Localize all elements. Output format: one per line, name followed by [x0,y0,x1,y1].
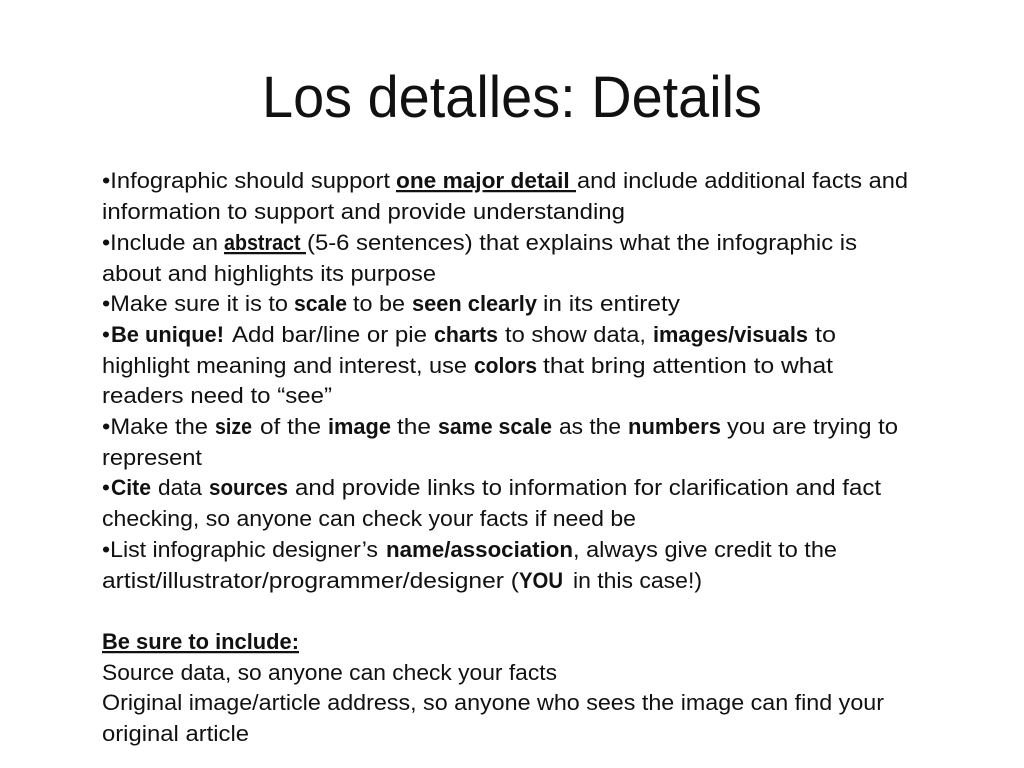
bullet: cite sources: checking, so anyone can check your facts if need be [102,506,636,531]
bullet: be unique: that bring attention to what [543,353,834,378]
bullet: be unique: to show data, [505,322,646,347]
bullet: one major detail: information to support and provide understanding [102,199,625,224]
bullet: one major detail: •Infographic should support [102,168,391,193]
bullet: size of image: of the [260,414,321,439]
line: source data: Source data, so anyone can check your facts [102,660,557,685]
bullet: scale: scale [294,291,347,316]
bullet: designer credit: artist/illustrator/programmer/designer ( [102,568,520,593]
bullet: scale: •Make sure it is to [102,291,288,316]
bullet: designer credit: •List infographic designer’s [102,537,378,562]
bullet: abstract: abstract [224,230,306,255]
bullet: be unique: highlight meaning and interest, use [102,353,467,378]
bullet: cite sources: sources [209,475,288,500]
bullet: size of image: •Make the [102,414,208,439]
bullet: size of image: as the [559,414,621,439]
bullet: designer credit: in this case!) [573,568,702,593]
bullet: be unique: images/visuals [653,322,808,347]
bullet: be unique: Add bar/line or pie [232,322,427,347]
bullet: abstract [102,230,857,286]
bullet: designer credit: , always give credit to the [573,537,837,562]
text block: be sure to include [102,629,885,746]
bullet: be unique: Be unique! [111,322,224,347]
bullet: size of image: numbers [628,414,721,439]
bullet: cite sources: • [102,475,110,500]
bullet: size of image: same scale [438,414,552,439]
bullet: size of image: image [328,414,391,439]
line: original address: original article [102,721,249,746]
bullet: size of image: you are trying to [727,414,898,439]
bullet: designer credit: YOU [519,568,563,593]
bullet: scale [102,291,681,316]
line: original address: Original image/article address, so anyone who sees the image can find your [102,690,885,715]
bullet: be unique: • [102,322,110,347]
bullet: be unique [102,322,836,408]
bullet: be unique: charts [434,322,498,347]
bullet: one major detail: one major detail [396,168,576,193]
bullet: abstract: (5-6 sentences) that explains what the infographic is [307,230,857,255]
bullet: size of image: size [215,414,252,439]
bullet: designer credit [102,537,837,593]
title: Los detalles: Details [262,65,762,130]
bullet: abstract: about and highlights its purpose [102,261,436,286]
bullet: cite sources: data [158,475,202,500]
bullet: be unique: readers need to “see” [102,383,332,408]
bullet: designer credit: name/association [386,537,573,562]
bullet: cite sources: Cite [111,475,151,500]
bullet: cite sources [102,475,882,531]
bullet: one major detail [102,168,908,224]
bullet: size of image: the [397,414,431,439]
bullet: one major detail: and include additional facts and [577,168,908,193]
bullet: scale: in its entirety [543,291,681,316]
bullet: cite sources: and provide links to information for clarification and fact [295,475,882,500]
bullet: scale: to be [353,291,405,316]
bullet: be unique: to [815,322,836,347]
bullet: be unique: colors [474,353,537,378]
line: original address [102,690,885,746]
text block: bullet list [102,168,908,593]
bullet: scale: seen clearly [412,291,537,316]
bullet: size of image: represent [102,445,203,470]
subheading: Be sure to include: [102,629,299,654]
bullet: size of image [102,414,898,470]
bullet: abstract: •Include an [102,230,218,255]
